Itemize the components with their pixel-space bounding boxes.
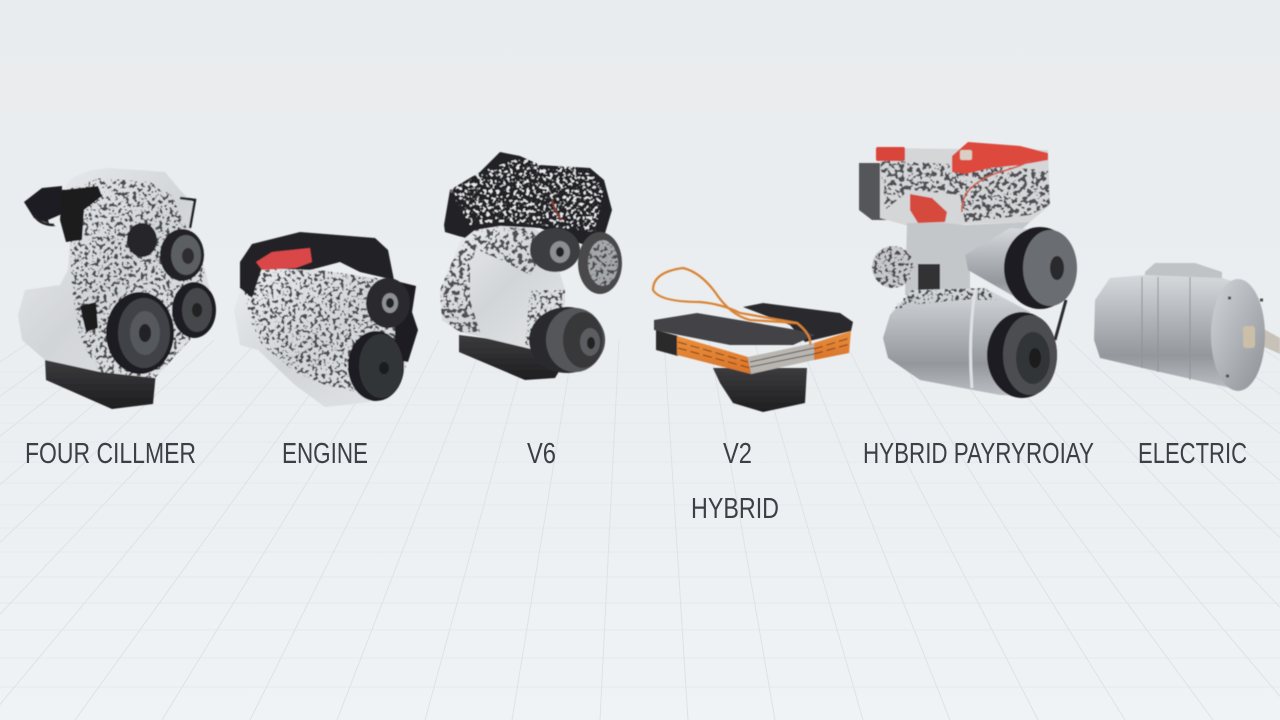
lower motor face <box>987 312 1057 398</box>
label: four cylinder: FOUR CILLMER <box>25 438 196 470</box>
silver block <box>440 225 565 350</box>
crankcase <box>234 262 415 407</box>
lower motor rib <box>971 290 975 388</box>
oil sump <box>45 358 156 409</box>
top plate <box>654 313 815 345</box>
hybrid battery pack <box>653 268 853 412</box>
lower motor top speckle <box>890 288 1000 312</box>
dark blotch upper <box>60 186 102 242</box>
engine: inline <box>234 232 418 407</box>
block texture left <box>440 240 480 332</box>
motor body <box>1094 275 1245 390</box>
block texture upper <box>470 226 545 275</box>
label: engine: ENGINE <box>282 438 368 470</box>
lower motor cylinder <box>883 288 1032 396</box>
red wiring hint <box>552 200 562 220</box>
upper motor cylinder <box>965 228 1045 305</box>
right pulley <box>578 232 622 294</box>
belt <box>1055 300 1066 340</box>
cell lines centre <box>750 348 814 367</box>
orange cells front <box>677 336 751 374</box>
right pulley <box>172 282 216 338</box>
central column <box>905 222 1030 295</box>
electric motor <box>1094 263 1280 391</box>
intake hose <box>34 215 54 225</box>
engine: four cylinder <box>18 168 216 409</box>
red hose <box>962 160 1030 212</box>
upper pulley <box>366 278 410 328</box>
orange wire <box>653 268 810 345</box>
red cover large <box>952 142 1048 174</box>
top plate <box>1145 263 1222 282</box>
intake hardware <box>24 186 62 226</box>
label: electric: ELECTRIC <box>1138 438 1247 470</box>
shaft collar <box>1243 326 1255 348</box>
label: hybrid powertrain: HYBRID PAYRYROIAY <box>863 438 1094 470</box>
crank pulley <box>106 292 174 374</box>
crankcase texture <box>244 262 415 395</box>
block texture right <box>525 290 565 345</box>
oil sump <box>459 335 566 380</box>
upper engine block <box>880 148 1050 240</box>
cell lines right <box>814 338 850 354</box>
engine: V6 <box>440 152 622 380</box>
hybrid powertrain <box>859 142 1077 398</box>
crank pulley <box>348 331 404 401</box>
motor shaft <box>1245 328 1280 354</box>
top speckle <box>450 158 604 232</box>
side accessory <box>395 282 418 362</box>
upper motor face <box>1004 227 1077 309</box>
block detail texture <box>60 178 205 378</box>
label: V6: V6 <box>527 438 556 470</box>
gear <box>872 246 914 288</box>
dark top cover <box>240 232 394 298</box>
label: hybrid: HYBRID <box>691 493 779 525</box>
back plate <box>743 303 853 342</box>
end cap bolts <box>1226 298 1263 376</box>
small idler pulley <box>127 223 157 257</box>
motor ribs <box>1142 277 1190 380</box>
right bracket <box>180 198 195 228</box>
label: V2: V2 <box>723 438 752 470</box>
dark blotch lower <box>80 302 98 332</box>
crank pulley <box>529 307 605 373</box>
left cell edge <box>656 330 678 356</box>
upper block texture <box>880 160 1050 222</box>
end cap <box>1211 279 1265 391</box>
cell lines front <box>678 342 750 368</box>
red manifold <box>256 248 312 270</box>
upper pulley <box>160 229 204 281</box>
cam pulley <box>530 228 580 272</box>
dark bracket <box>918 264 940 290</box>
red cover small <box>876 147 905 161</box>
base block <box>713 368 807 412</box>
orange cells right <box>814 331 851 360</box>
dark top <box>444 152 612 250</box>
engine block <box>18 168 215 378</box>
red pump <box>910 194 947 223</box>
cover window <box>960 150 972 160</box>
silver cell centre <box>748 343 814 374</box>
left dark box <box>859 163 900 220</box>
